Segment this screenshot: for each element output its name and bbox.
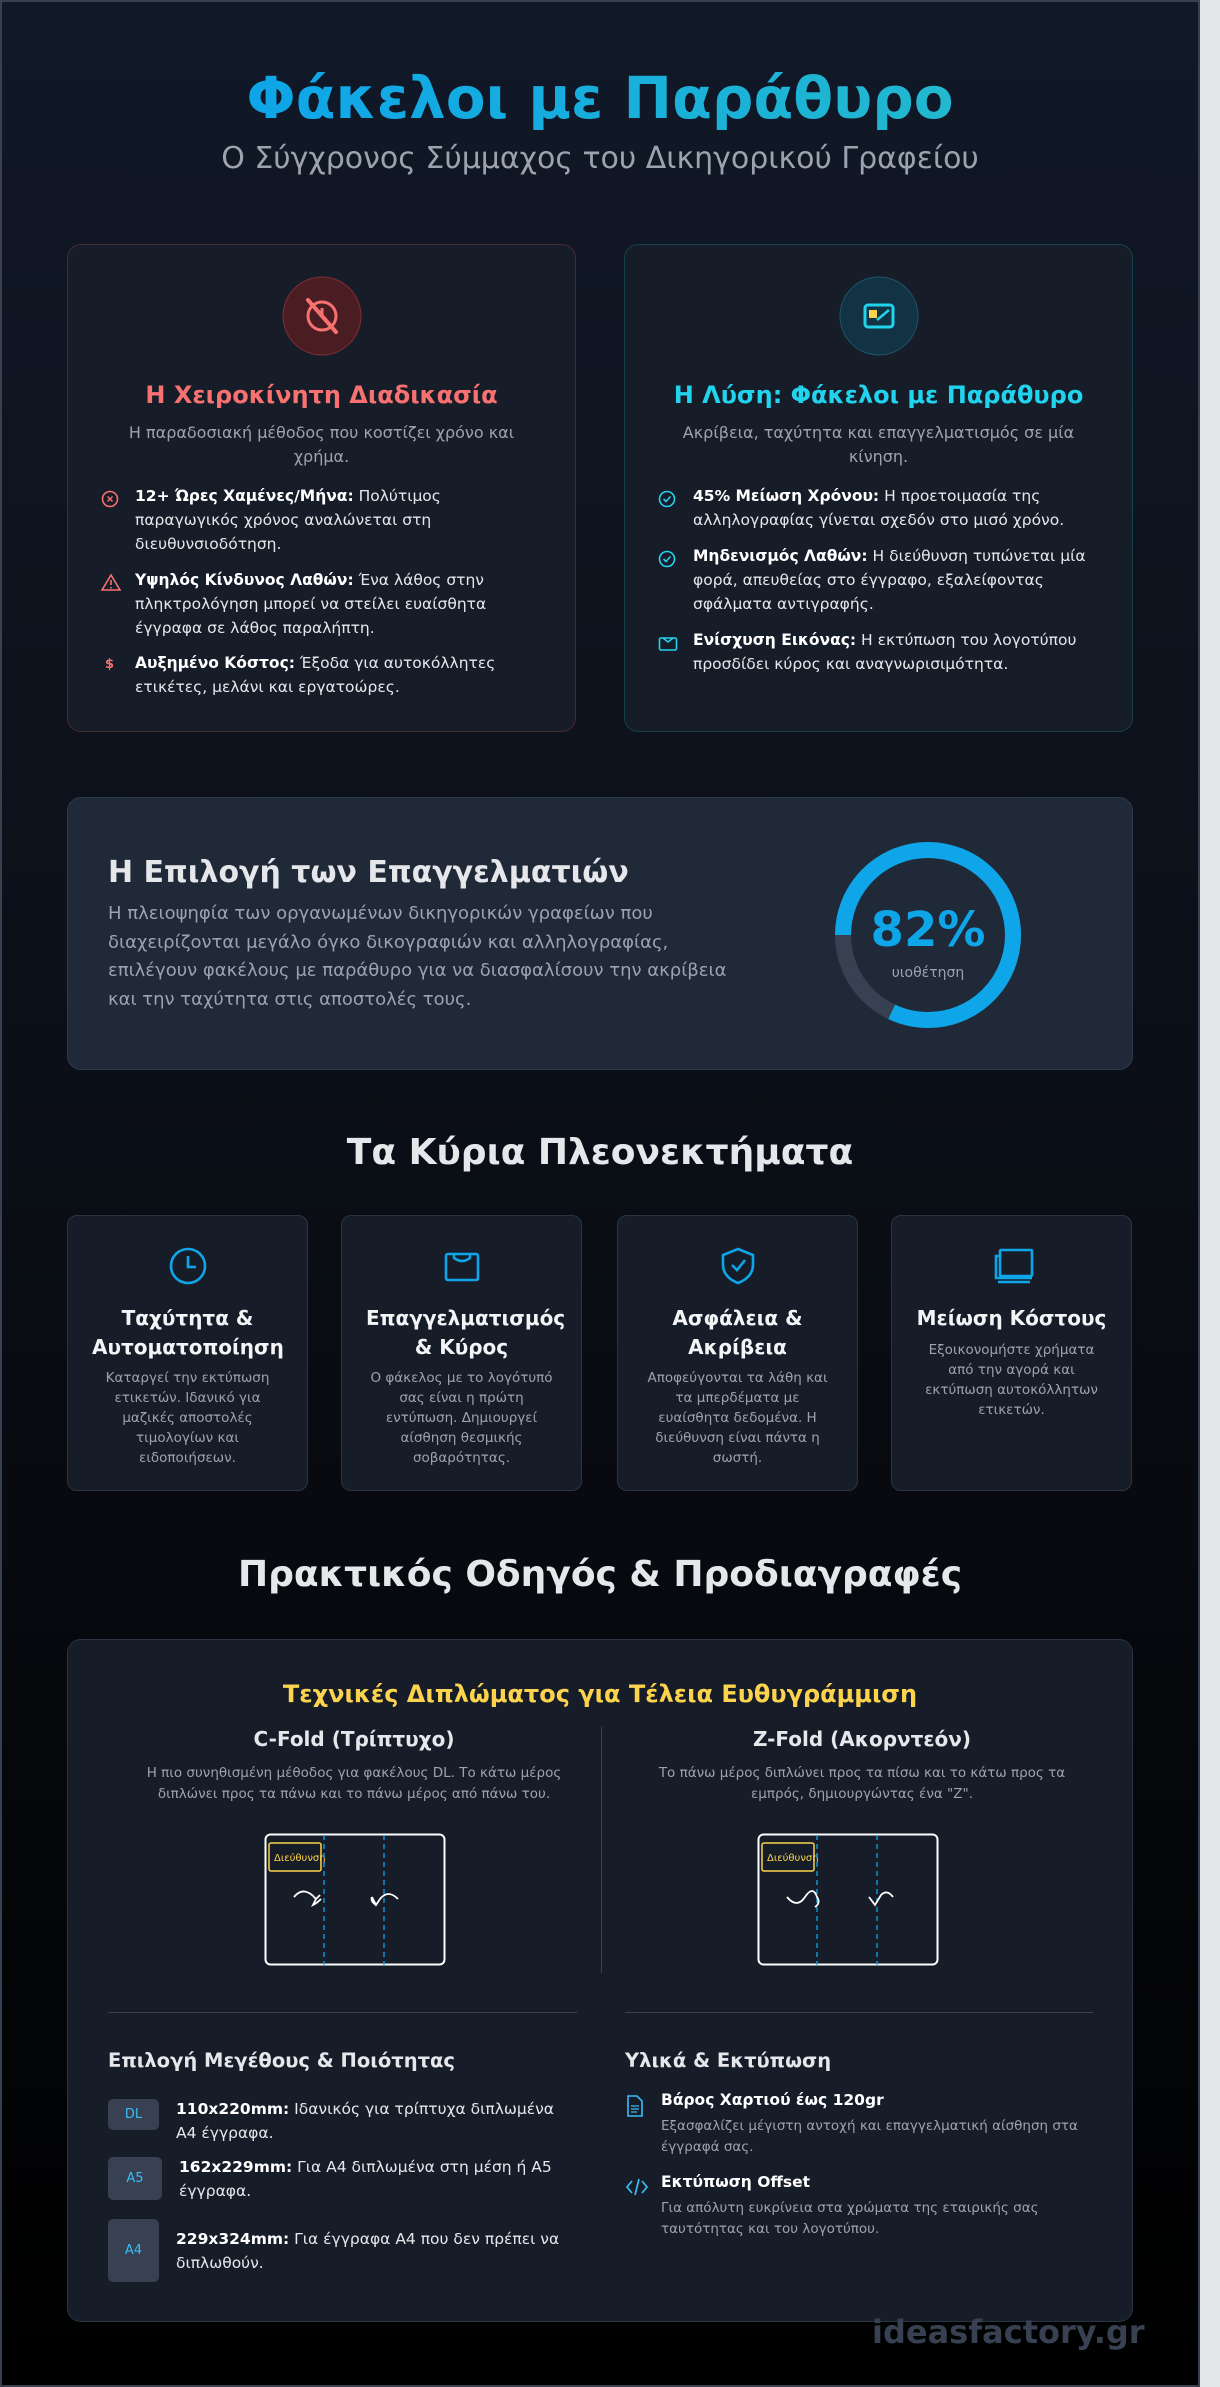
list item 3: Ενίσχυση Εικόνας: Η εκτύπωση του λογοτύπου προσδίδει κύρος και αναγνωρισιμότητα.: [693, 631, 1076, 673]
dividers: [108, 2012, 577, 2013]
list item 2: Μηδενισμός Λαθών: Η διεύθυνση τυπώνεται μία φορά, απευθείας στο έγγραφο, εξαλείφοντας σφάλματα αντιγραφής.: [693, 547, 1086, 613]
list item 2: Υψηλός Κίνδυνος Λαθών: Ένα λάθος στην πληκτρολόγηση μπορεί να στείλει ευαίσθητα έγγραφα σε λάθος παραλήπτη.: [135, 571, 486, 637]
card: security: [617, 1215, 858, 1491]
size A4: 229x324mm: Για έγγραφα A4 που δεν πρέπει να διπλωθούν.: [176, 2230, 559, 2272]
heading: guide: Πρακτικός Οδηγός & Προδιαγραφές: [238, 1554, 962, 1595]
description: Ακρίβεια, ταχύτητα και επαγγελματισμός σε μία κίνηση.: [683, 423, 1074, 466]
diagram: C-fold: [264, 1834, 446, 1966]
heading: Η Λύση: Φάκελοι με Παράθυρο: [674, 381, 1083, 409]
material: paper weight: Εξασφαλίζει μέγιστη αντοχή και επαγγελματική αίσθηση στα έγγραφά σας.: [661, 2118, 1078, 2155]
size DL: DL: [125, 2107, 142, 2122]
footer brand: ideasfactory.gr: [872, 2313, 1145, 2351]
icon: clock crossed: [282, 276, 362, 356]
paragraph: Η πλειοψηφία των οργανωμένων δικηγορικών γραφείων που διαχειρίζονται μεγάλο όγκο δικογραφιών και αλληλογραφίας, επιλέγουν φακέλους με παράθυρο για να διασφαλίσουν την ακρίβεια και την ταχύτητα στις αποστολές τους.: [108, 903, 726, 1010]
list item 1: 45% Μείωση Χρόνου: Η προετοιμασία της αλληλογραφίας γίνεται σχεδόν στο μισό χρόνο.: [693, 487, 1064, 529]
heading: Η Χειροκίνητη Διαδικασία: [145, 381, 498, 409]
size A4: A4: [125, 2243, 142, 2258]
diagram: Z-fold: [758, 1834, 938, 1966]
panel: manual process: [67, 244, 576, 732]
chart: donut 82%: [835, 842, 1021, 1028]
diagram: C-fold: Διεύθυνση: [274, 1852, 326, 1864]
Z-fold column: Το πάνω μέρος διπλώνει προς τα πίσω και το κάτω προς τα εμπρός, δημιουργώντας ένα "Z".: [659, 1765, 1065, 1802]
heading: materials: Υλικά & Εκτύπωση: [625, 2049, 831, 2072]
heading: folding: Τεχνικές Διπλώματος για Τέλεια Ευθυγράμμιση: [283, 1680, 917, 1708]
description: Η παραδοσιακή μέθοδος που κοστίζει χρόνο και χρήμα.: [129, 423, 514, 466]
heading: sizes: Επιλογή Μεγέθους & Ποιότητας: [108, 2049, 455, 2072]
card: security: Ασφάλεια & Ακρίβεια: [672, 1306, 803, 1359]
heading: advantages: Τα Κύρια Πλεονεκτήματα: [347, 1132, 853, 1173]
card: security: Αποφεύγονται τα λάθη και τα μπερδέματα με ευαίσθητα δεδομένα. Η διεύθυνση είναι πάντα η σωστή.: [647, 1370, 828, 1466]
card: speed: Ταχύτητα & Αυτοματοποίηση: [92, 1306, 284, 1359]
card: professionalism: Ο φάκελος με το λογότυπό σας είναι η πρώτη εντύπωση. Δημιουργεί αίσθηση θεσμικής σοβαρότητας.: [370, 1370, 553, 1466]
panel: solution: [624, 244, 1133, 732]
chart: donut 82%: υιοθέτηση: [892, 965, 964, 981]
subtitle: Ο Σύγχρονος Σύμμαχος του Δικηγορικού Γραφείου: [221, 141, 979, 176]
Z-fold column: [658, 1727, 1065, 1802]
diagram: Z-fold: Διεύθυνση: [767, 1852, 819, 1864]
list item 1: 12+ Ώρες Χαμένες/Μήνα: Πολύτιμος παραγωγικός χρόνος αναλώνεται στη διευθυνσιοδότηση.: [135, 487, 441, 553]
material: offset printing: [626, 2173, 1039, 2237]
size A5: 162x229mm: Για A4 διπλωμένα στη μέση ή A5 έγγραφα.: [179, 2158, 552, 2200]
size A4: [108, 2219, 559, 2282]
heading: Η Επιλογή των Επαγγελματιών: [108, 855, 629, 890]
C-fold column: [147, 1727, 561, 1802]
card: cost: Εξοικονομήστε χρήματα από την αγορά και εκτύπωση αυτοκόλλητων ετικετών.: [925, 1342, 1098, 1418]
size DL: 110x220mm: Ιδανικός για τρίπτυχα διπλωμένα A4 έγγραφα.: [176, 2100, 554, 2142]
size A5: A5: [126, 2171, 144, 2186]
card: cost: Μείωση Κόστους: [917, 1306, 1106, 1330]
panel: guide: [67, 1639, 1133, 2322]
card: cost: [891, 1215, 1132, 1491]
list item 3: Αυξημένο Κόστος: Έξοδα για αυτοκόλλητες ετικέτες, μελάνι και εργατοώρες.: [135, 654, 495, 696]
divider vertical: [601, 1727, 602, 1973]
card: professionalism: [341, 1215, 582, 1491]
panel: adoption stat: [67, 797, 1133, 1070]
panel: manual process: $: [105, 657, 114, 672]
icon: window envelope: [840, 276, 918, 356]
C-fold column: Η πιο συνηθισμένη μέθοδος για φακέλους DL. Το κάτω μέρος διπλώνει προς τα πάνω και το πάνω μέρος από πάνω του.: [147, 1765, 561, 1802]
material: offset printing: Για απόλυτη ευκρίνεια στα χρώματα της εταιρικής σας ταυτότητας και του λογοτύπου.: [661, 2200, 1039, 2237]
chart: donut 82%: 82%: [871, 902, 985, 958]
material: paper weight: Βάρος Χαρτιού έως 120gr: [661, 2091, 884, 2109]
C-fold column: C-Fold (Τρίπτυχο): [254, 1727, 454, 1751]
material: offset printing: Εκτύπωση Offset: [661, 2173, 810, 2191]
card: speed: [67, 1215, 308, 1491]
title: Φάκελοι με Παράθυρο: [246, 64, 954, 132]
Z-fold column: Z-Fold (Ακορντεόν): [753, 1727, 971, 1751]
card: speed: Καταργεί την εκτύπωση ετικετών. Ιδανικό για μαζικές αποστολές τιμολογίων και ειδοποιήσεων.: [106, 1370, 269, 1466]
material: paper weight: [627, 2091, 1078, 2155]
card: professionalism: Επαγγελματισμός & Κύρος: [366, 1306, 565, 1359]
